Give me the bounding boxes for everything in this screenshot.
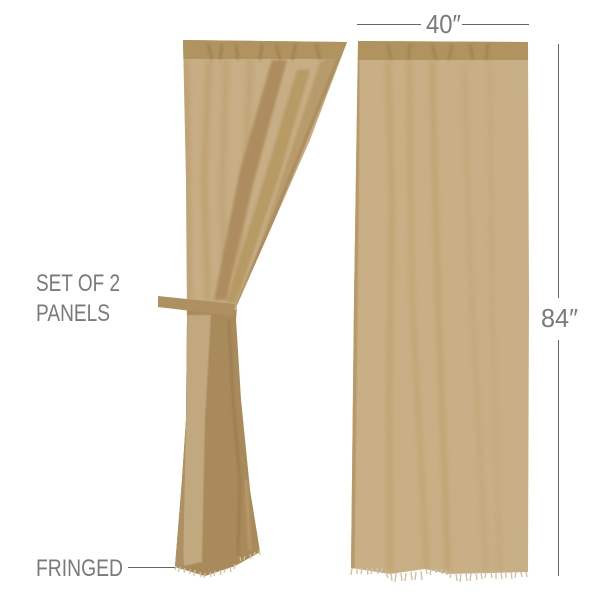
left curtain: tied back panel (170, 36, 350, 581)
dimension: width 40 inches: 40″ (426, 9, 461, 39)
label: set of 2 panels: SET OF 2 (36, 270, 120, 297)
label: fringed with leader line: FRINGED (36, 555, 123, 582)
right curtain: flat panel (345, 38, 535, 582)
label: set of 2 panels: PANELS (36, 300, 110, 327)
dimension: height 84 inches: 84″ (541, 303, 578, 333)
header band (183, 40, 347, 59)
tie-back strap (158, 296, 235, 316)
fringe (175, 550, 260, 578)
fringe (351, 568, 527, 582)
fold shading (385, 62, 451, 570)
fold shading (186, 60, 250, 300)
label: set of 2 panels (36, 270, 120, 327)
lower drape (175, 310, 260, 576)
header band (358, 41, 528, 60)
